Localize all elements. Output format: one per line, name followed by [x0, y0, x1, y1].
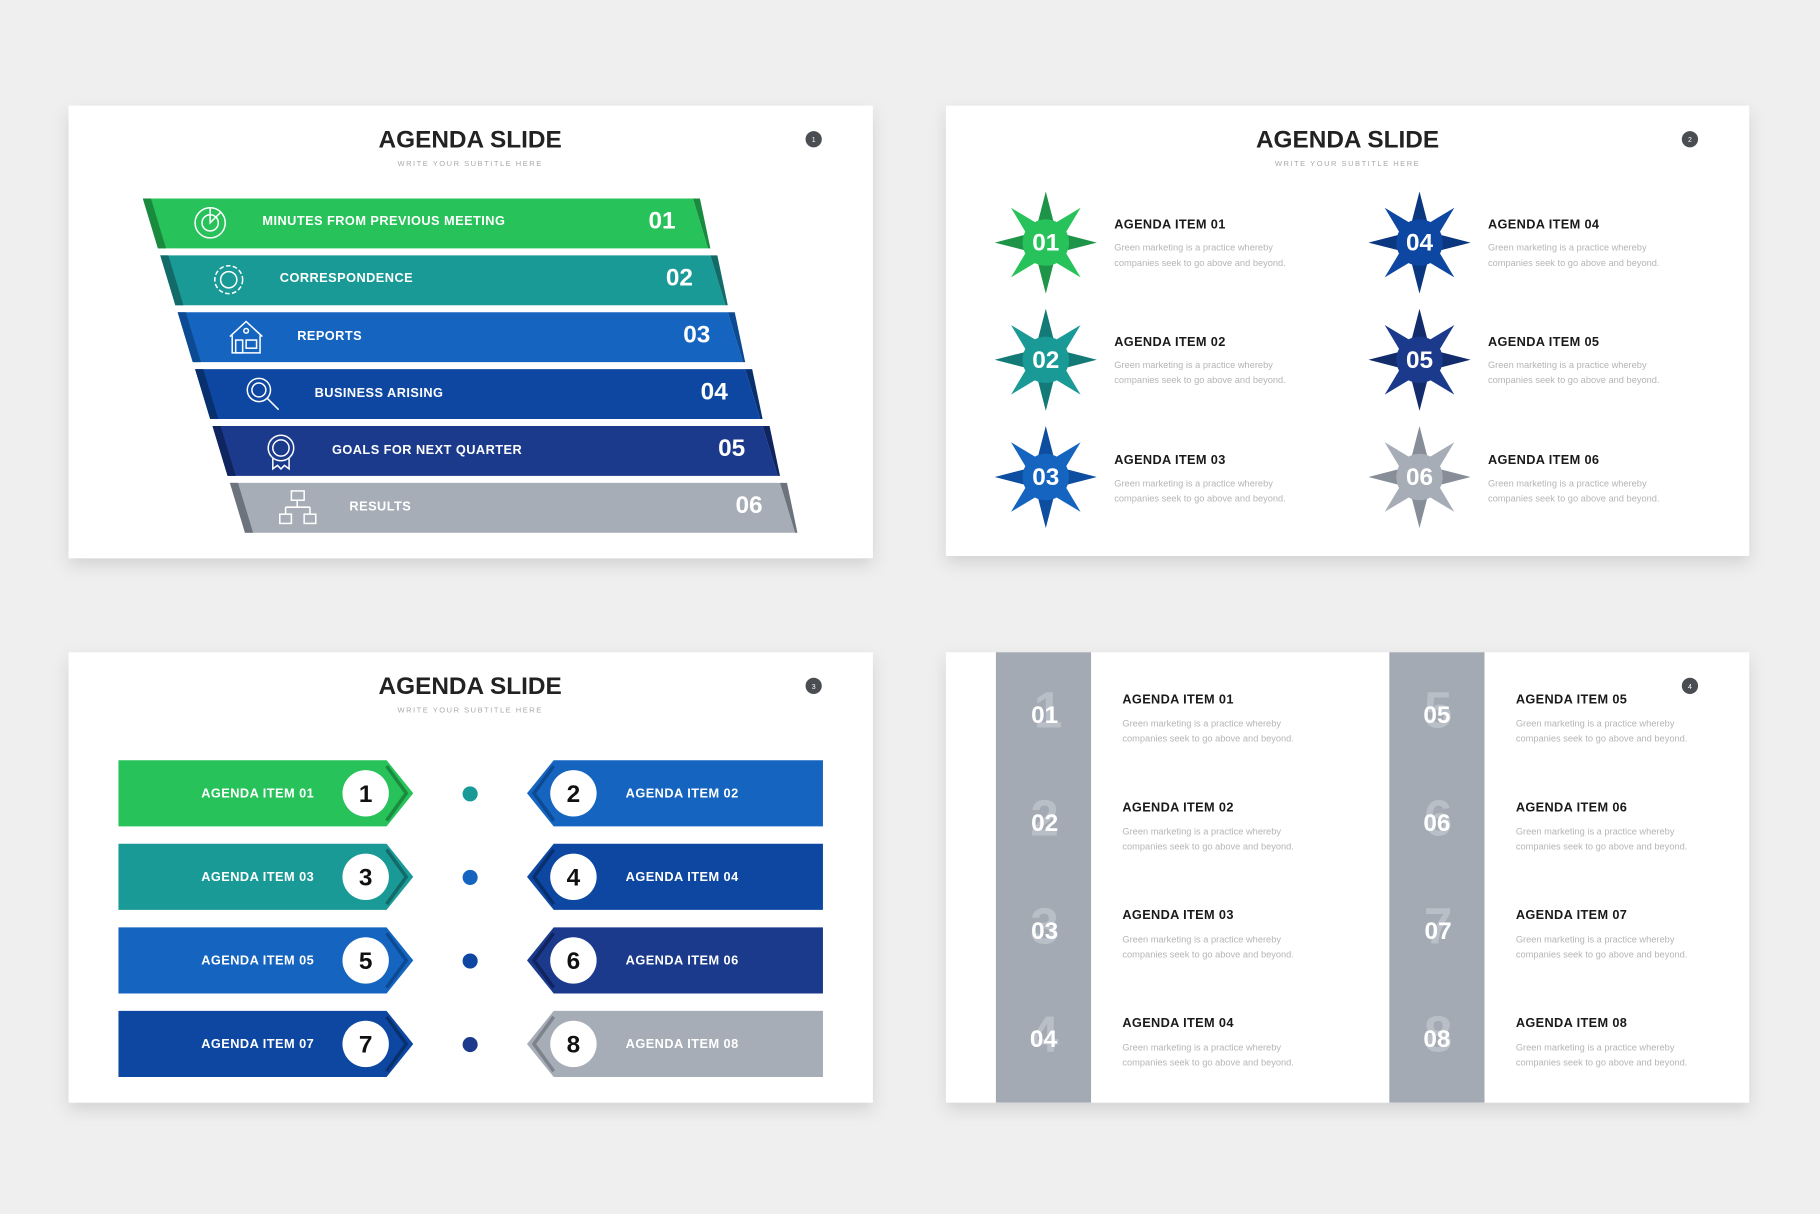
column item texts: Green marketing is a practice whereby	[1122, 826, 1281, 836]
item 06 text	[1488, 452, 1660, 503]
bar 01: 01	[648, 208, 676, 235]
item 04 text	[1488, 217, 1660, 268]
arrow item 6: 6	[567, 948, 580, 975]
arrow item 2	[527, 760, 823, 826]
column numbers: 7	[1424, 898, 1452, 955]
star 04	[1368, 192, 1471, 294]
item 04 text: Green marketing is a practice whereby	[1488, 243, 1647, 253]
column item texts: companies seek to go above and beyond.	[1122, 842, 1294, 852]
bar 02: CORRESPONDENCE	[280, 270, 413, 285]
star 02	[995, 309, 1097, 411]
page number 1: 1	[812, 137, 816, 144]
arrow item 7	[118, 1011, 413, 1077]
bar 01: MINUTES FROM PREVIOUS MEETING	[262, 213, 505, 228]
bar 04: 04	[701, 378, 728, 405]
column item texts: Green marketing is a practice whereby	[1516, 934, 1675, 944]
arrow item 8: AGENDA ITEM 08	[626, 1036, 739, 1051]
arrow item 7: AGENDA ITEM 07	[201, 1036, 314, 1051]
star 01	[995, 192, 1097, 294]
item 06 text: Green marketing is a practice whereby	[1488, 478, 1647, 488]
bar 04	[195, 369, 763, 419]
column item texts: companies seek to go above and beyond.	[1516, 734, 1687, 744]
column item texts: AGENDA ITEM 02	[1122, 799, 1234, 814]
column item texts: companies seek to go above and beyond.	[1516, 950, 1687, 960]
column numbers: 07	[1425, 918, 1452, 945]
gray column left	[996, 652, 1091, 1103]
panel: slide 2 star agenda	[946, 106, 1749, 556]
bar 02	[160, 255, 728, 305]
bar 06	[230, 483, 797, 533]
arrow item 1	[118, 760, 413, 826]
item 02 text	[1114, 334, 1286, 385]
title 1: AGENDA SLIDE	[379, 126, 562, 153]
arrow item 4: AGENDA ITEM 04	[626, 869, 739, 884]
item 05 text: companies seek to go above and beyond.	[1488, 375, 1660, 385]
column numbers: 02	[1031, 810, 1058, 837]
column numbers: 4	[1030, 1006, 1059, 1063]
bar 05: GOALS FOR NEXT QUARTER	[332, 442, 522, 457]
title 2: AGENDA SLIDE	[1256, 126, 1439, 153]
arrow item 1: AGENDA ITEM 01	[201, 785, 314, 800]
item 01 text: Green marketing is a practice whereby	[1114, 243, 1273, 253]
column item texts: companies seek to go above and beyond.	[1516, 1057, 1687, 1067]
column item texts: Green marketing is a practice whereby	[1122, 719, 1281, 729]
item 01 text	[1114, 217, 1286, 268]
arrow item 3: 3	[359, 865, 372, 892]
star 05: 05	[1406, 347, 1433, 374]
column numbers: 06	[1423, 810, 1450, 837]
arrow item 2: AGENDA ITEM 02	[626, 785, 739, 800]
column item texts: Green marketing is a practice whereby	[1516, 719, 1675, 729]
column numbers: 01	[1031, 702, 1058, 729]
arrow item 5: AGENDA ITEM 05	[201, 952, 314, 967]
column item texts: Green marketing is a practice whereby	[1516, 826, 1675, 836]
bar 03	[178, 312, 745, 362]
arrow item 5: 5	[359, 948, 372, 975]
item 03 text: companies seek to go above and beyond.	[1114, 493, 1286, 503]
subtitle 3: WRITE YOUR SUBTITLE HERE	[397, 706, 543, 715]
arrow item 1: 1	[359, 781, 372, 808]
arrow item 4	[527, 844, 823, 910]
bar 06: RESULTS	[349, 499, 411, 514]
star 06: 06	[1406, 464, 1433, 491]
title 3: AGENDA SLIDE	[379, 673, 562, 700]
star 03: 03	[1032, 464, 1059, 491]
arrow item 3	[118, 844, 413, 910]
item 03 text	[1114, 452, 1286, 503]
subtitle 1: WRITE YOUR SUBTITLE HERE	[397, 159, 543, 168]
bar 05: 05	[718, 435, 745, 462]
item 03 text: Green marketing is a practice whereby	[1114, 478, 1273, 488]
page number 2: 2	[1688, 137, 1692, 144]
bar 04: BUSINESS ARISING	[315, 385, 443, 400]
column item texts: companies seek to go above and beyond.	[1516, 842, 1687, 852]
item 04 text: companies seek to go above and beyond.	[1488, 258, 1660, 268]
bar 06: 06	[735, 492, 763, 519]
column item texts	[1122, 691, 1687, 1067]
column numbers: 1	[1034, 682, 1062, 739]
bar 02: 02	[666, 265, 693, 292]
column numbers: 3	[1030, 898, 1059, 955]
center dots	[463, 786, 478, 1052]
column item texts: AGENDA ITEM 08	[1516, 1015, 1627, 1030]
column numbers: 08	[1423, 1026, 1450, 1053]
column numbers: 5	[1424, 682, 1452, 739]
column numbers: 8	[1424, 1006, 1452, 1063]
star 04: 04	[1406, 230, 1434, 257]
arrow item 6	[527, 927, 823, 993]
item 02 text: AGENDA ITEM 02	[1114, 334, 1226, 349]
item 02 text: Green marketing is a practice whereby	[1114, 360, 1273, 370]
page number 1	[806, 131, 822, 147]
column numbers: 03	[1031, 918, 1058, 945]
column item texts: AGENDA ITEM 04	[1122, 1015, 1234, 1030]
column item texts: AGENDA ITEM 07	[1516, 907, 1627, 922]
column item texts: AGENDA ITEM 06	[1516, 799, 1627, 814]
arrow item 6: AGENDA ITEM 06	[626, 952, 739, 967]
column item texts: AGENDA ITEM 05	[1516, 691, 1627, 706]
star 02: 02	[1032, 347, 1059, 374]
item 05 text	[1488, 334, 1660, 385]
star 03	[995, 426, 1097, 528]
arrow item 4: 4	[567, 865, 581, 892]
column item texts: companies seek to go above and beyond.	[1122, 1057, 1294, 1067]
panel: slide 4 column agenda	[946, 652, 1749, 1103]
star 06	[1368, 426, 1471, 528]
column item texts: Green marketing is a practice whereby	[1122, 1042, 1281, 1052]
item 04 text: AGENDA ITEM 04	[1488, 217, 1600, 232]
bar 05	[212, 426, 780, 476]
column item texts: Green marketing is a practice whereby	[1122, 934, 1281, 944]
column item texts: AGENDA ITEM 01	[1122, 691, 1234, 706]
star 01: 01	[1032, 230, 1059, 257]
page number 4: 4	[1688, 684, 1692, 691]
column numbers: 2	[1030, 790, 1059, 847]
item 05 text: AGENDA ITEM 05	[1488, 334, 1599, 349]
page number 4	[1682, 678, 1698, 694]
item 05 text: Green marketing is a practice whereby	[1488, 360, 1647, 370]
gray column right	[1389, 652, 1485, 1103]
arrow item 8	[527, 1011, 823, 1077]
page number 3	[806, 678, 822, 694]
arrow item 5	[118, 927, 413, 993]
star 05	[1368, 309, 1471, 411]
column numbers: 6	[1424, 790, 1452, 847]
arrow item 7: 7	[359, 1032, 372, 1059]
subtitle 2: WRITE YOUR SUBTITLE HERE	[1275, 159, 1420, 168]
item 02 text: companies seek to go above and beyond.	[1114, 375, 1286, 385]
page number 3: 3	[812, 684, 816, 691]
column item texts: companies seek to go above and beyond.	[1122, 734, 1294, 744]
item 06 text: AGENDA ITEM 06	[1488, 452, 1599, 467]
column numbers: 04	[1030, 1026, 1057, 1053]
column numbers	[1030, 682, 1452, 1063]
bar 03: 03	[683, 321, 710, 348]
item 01 text: companies seek to go above and beyond.	[1114, 258, 1286, 268]
item 03 text: AGENDA ITEM 03	[1114, 452, 1226, 467]
column item texts: companies seek to go above and beyond.	[1122, 950, 1294, 960]
column item texts: Green marketing is a practice whereby	[1516, 1042, 1675, 1052]
bar 01	[143, 198, 710, 248]
item 06 text: companies seek to go above and beyond.	[1488, 493, 1660, 503]
bar 03: REPORTS	[297, 328, 362, 343]
arrow item 3: AGENDA ITEM 03	[201, 869, 314, 884]
arrow item 2: 2	[567, 781, 580, 808]
panel: slide 1 funnel agenda	[69, 106, 873, 558]
page number 2	[1682, 131, 1698, 147]
arrow item 8: 8	[567, 1032, 580, 1059]
panel: slide 3 arrow agenda	[69, 652, 873, 1103]
item 01 text: AGENDA ITEM 01	[1114, 217, 1226, 232]
column item texts: AGENDA ITEM 03	[1122, 907, 1234, 922]
column numbers: 05	[1423, 702, 1450, 729]
